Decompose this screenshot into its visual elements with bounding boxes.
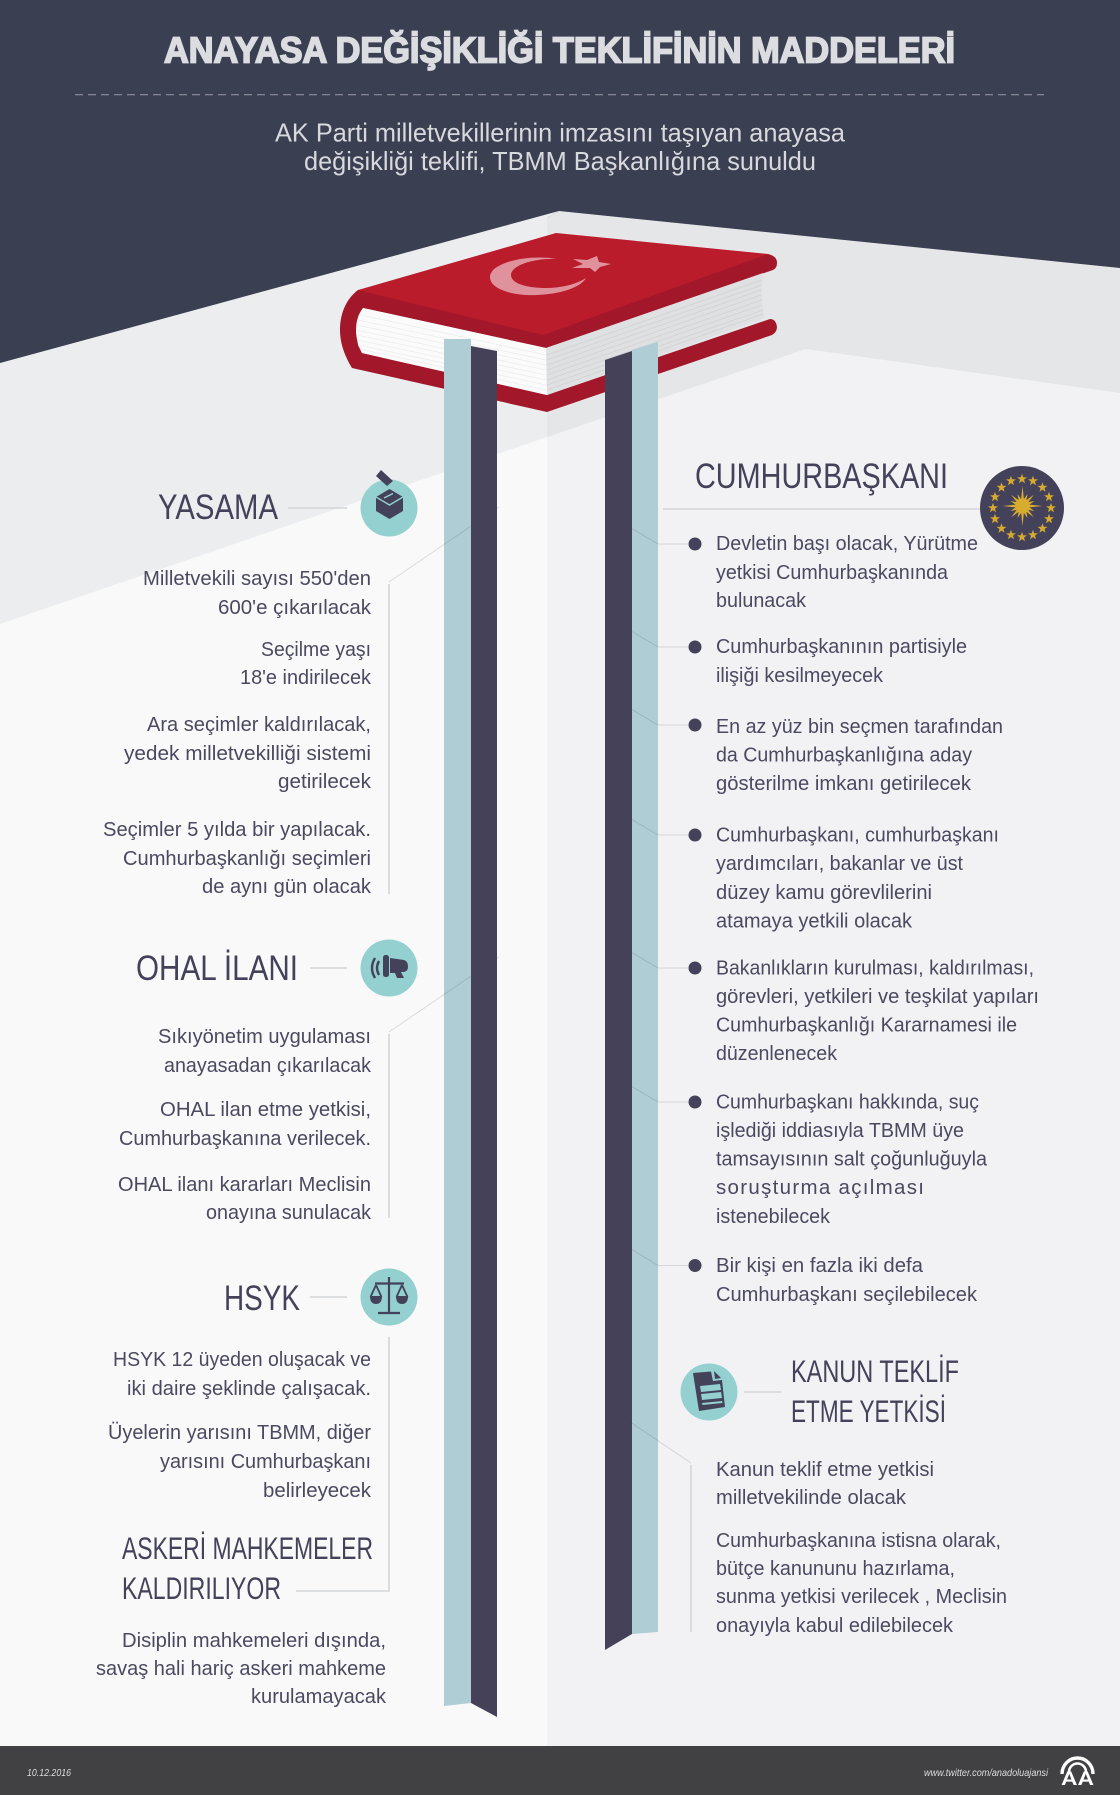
footer bar xyxy=(0,1746,1120,1795)
text block: cumhurbaskani items: Bir kişi en fazla iki defa xyxy=(716,1254,924,1277)
heading: kanun teklif xyxy=(791,1353,959,1429)
text block: askeri items: Disiplin mahkemeleri dışında, xyxy=(122,1629,386,1652)
text block: yasama items: yedek milletvekilliği sistemi xyxy=(124,742,371,765)
text block: cumhurbaskani items: bulunacak xyxy=(716,589,807,612)
text block: ohal items: onayına sunulacak xyxy=(206,1201,372,1224)
text block: cumhurbaskani items: düzey kamu görevlilerini xyxy=(716,881,932,904)
heading: askeri mahkemeler xyxy=(122,1530,373,1606)
icon: megaphone xyxy=(360,940,418,996)
right ribbon bookmark xyxy=(605,342,658,1650)
illustration: constitution book xyxy=(340,233,777,412)
text block: ohal items: Cumhurbaşkanına verilecek. xyxy=(119,1127,371,1150)
heading: cumhurbaskani: CUMHURBAŞKANI xyxy=(695,457,948,496)
book pages left xyxy=(356,308,547,395)
logo: anadolu agency xyxy=(1061,1758,1094,1790)
text block: cumhurbaskani items: istenebilecek xyxy=(716,1205,831,1228)
text block: yasama items: Cumhurbaşkanlığı seçimleri xyxy=(123,847,371,870)
heading: kanun teklif: KANUN TEKLİF xyxy=(791,1353,959,1389)
flag star xyxy=(572,256,611,272)
icon: presidential seal xyxy=(980,466,1064,550)
text block: cumhurbaskani items: Cumhurbaşkanının partisiyle xyxy=(716,635,967,658)
text block: kanun items: bütçe kanununu hazırlama, xyxy=(716,1557,955,1580)
text block: hsyk items: belirleyecek xyxy=(263,1479,372,1502)
footer date: 10.12.2016 xyxy=(27,1768,71,1779)
heading: kanun teklif: ETME YETKİSİ xyxy=(791,1393,946,1429)
panel: kanun teklif etme yetkisi xyxy=(605,1353,1007,1637)
text block: yasama items xyxy=(103,567,372,898)
text block: askeri items: kurulamayacak xyxy=(251,1685,387,1708)
text block: hsyk items xyxy=(108,1348,372,1502)
heading: yasama: YASAMA xyxy=(158,488,279,527)
text block: cumhurbaskani items: En az yüz bin seçmen tarafından xyxy=(716,715,1003,738)
text block: cumhurbaskani items: Cumhurbaşkanlığı Kararnamesi ile xyxy=(716,1014,1017,1036)
panel: ohal ilani xyxy=(118,940,499,1224)
heading: hsyk: HSYK xyxy=(224,1279,300,1318)
heading: ohal ilani: OHAL İLANI xyxy=(136,949,298,988)
title: ANAYASA DEĞİŞİKLİĞİ TEKLİFİNİN MADDELERİ xyxy=(164,30,955,70)
text block: cumhurbaskani items xyxy=(716,532,1039,1306)
panel: cumhurbaskani xyxy=(631,457,1064,1306)
text block: yasama items: Seçilme yaşı xyxy=(261,638,371,661)
text block: cumhurbaskani items: düzenlenecek xyxy=(716,1042,838,1065)
text block: cumhurbaskani items: Cumhurbaşkanı seçilebilecek xyxy=(716,1283,978,1306)
text block: hsyk items: iki daire şeklinde çalışacak. xyxy=(127,1377,371,1400)
text block: cumhurbaskani items: Cumhurbaşkanı, cumhurbaşkanı xyxy=(716,824,999,846)
text block: kanun items: milletvekilinde olacak xyxy=(716,1486,907,1509)
flag crescent xyxy=(490,258,586,295)
text block: cumhurbaskani items: görevleri, yetkileri ve teşkilat yapıları xyxy=(716,985,1039,1008)
panel: hsyk xyxy=(108,1268,418,1591)
panel: yasama xyxy=(103,470,499,898)
text block: kanun items: Kanun teklif etme yetkisi xyxy=(716,1458,934,1481)
icon: ballot box xyxy=(360,470,418,536)
text block: kanun items: onayıyla kabul edilebilecek xyxy=(716,1614,954,1637)
text block: cumhurbaskani items: atamaya yetkili olacak xyxy=(716,910,913,932)
footer twitter url: www.twitter.com/anadoluajansi xyxy=(924,1768,1049,1779)
bullet markers xyxy=(688,538,702,1272)
book back cover and spine xyxy=(340,254,777,412)
heading: askeri mahkemeler: KALDIRILIYOR xyxy=(122,1570,281,1606)
subtitle xyxy=(275,118,846,176)
subtitle: değişikliği teklifi, TBMM Başkanlığına sunuldu xyxy=(304,146,816,176)
text block: ohal items xyxy=(118,1025,372,1224)
text block: cumhurbaskani items: da Cumhurbaşkanlığına aday xyxy=(716,744,973,766)
icon: scales of justice xyxy=(360,1268,418,1326)
text block: yasama items: getirilecek xyxy=(278,770,372,793)
text block: yasama items: de aynı gün olacak xyxy=(202,875,372,898)
text block: cumhurbaskani items: yetkisi Cumhurbaşkanında xyxy=(716,561,949,584)
text block: cumhurbaskani items: işlediği iddiasıyla TBMM üye xyxy=(716,1119,964,1142)
text block: yasama items: 600'e çıkarılacak xyxy=(218,596,372,619)
text block: ohal items: anayasadan çıkarılacak xyxy=(164,1054,372,1077)
text block: hsyk items: Üyelerin yarısını TBMM, diğer xyxy=(108,1421,371,1444)
text block: ohal items: OHAL ilanı kararları Meclisin xyxy=(118,1173,371,1196)
text block: kanun items: sunma yetkisi verilecek , Meclisin xyxy=(716,1585,1007,1608)
text block: kanun items xyxy=(716,1458,1007,1637)
book pages right xyxy=(546,273,764,395)
text block: cumhurbaskani items: Bakanlıkların kurulması, kaldırılması, xyxy=(716,956,1034,980)
text block: yasama items: Seçimler 5 yılda bir yapılacak. xyxy=(103,818,371,841)
text block: cumhurbaskani items: tamsayısının salt çoğunluğuyla xyxy=(716,1148,988,1170)
book top cover xyxy=(358,233,768,335)
text block: hsyk items: HSYK 12 üyeden oluşacak ve xyxy=(113,1348,371,1371)
text block: yasama items: Ara seçimler kaldırılacak, xyxy=(147,713,371,736)
text block: cumhurbaskani items: gösterilme imkanı getirilecek xyxy=(716,772,972,795)
logo: anadolu agency: AA xyxy=(1061,1769,1094,1790)
text block: hsyk items: yarısını Cumhurbaşkanı xyxy=(160,1450,371,1473)
text block: ohal items: OHAL ilan etme yetkisi, xyxy=(160,1098,371,1121)
text block: cumhurbaskani items: yardımcıları, bakanlar ve üst xyxy=(716,852,963,875)
text block: cumhurbaskani items: Devletin başı olacak, Yürütme xyxy=(716,532,978,555)
text block: cumhurbaskani items: ilişiği kesilmeyecek xyxy=(716,664,884,687)
bullet connectors xyxy=(631,528,688,1266)
text block: kanun items: Cumhurbaşkanına istisna olarak, xyxy=(716,1529,1001,1552)
text block: askeri items: savaş hali hariç askeri mahkeme xyxy=(96,1657,386,1680)
subtitle: AK Parti milletvekillerinin imzasını taşıyan anayasa xyxy=(275,118,846,148)
text block: yasama items: Milletvekili sayısı 550'den xyxy=(143,567,371,590)
text block: cumhurbaskani items: soruşturma açılması xyxy=(716,1176,924,1199)
text block: yasama items: 18'e indirilecek xyxy=(240,666,372,689)
text block: ohal items: Sıkıyönetim uygulaması xyxy=(158,1025,371,1048)
text block: askeri items xyxy=(96,1629,387,1708)
text block: cumhurbaskani items: Cumhurbaşkanı hakkında, suç xyxy=(716,1090,979,1114)
left ribbon bookmark xyxy=(444,339,497,1717)
heading: askeri mahkemeler: ASKERİ MAHKEMELER xyxy=(122,1530,373,1566)
panel: askeri mahkemeler xyxy=(96,1530,387,1708)
icon: document xyxy=(680,1364,738,1420)
